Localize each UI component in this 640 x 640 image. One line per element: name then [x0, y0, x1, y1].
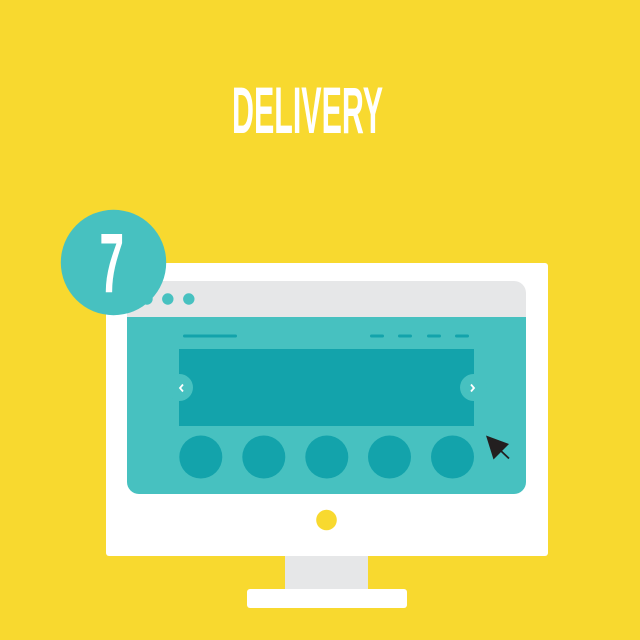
monitor stand neck — [285, 555, 368, 589]
delivery infographic: DELIVERY — [232, 73, 383, 147]
content circles — [179, 436, 474, 478]
step number: 7 — [100, 216, 124, 310]
icon: mouse cursor — [486, 436, 509, 460]
step number badge — [61, 210, 166, 315]
browser window — [127, 281, 526, 494]
navigation menu — [370, 334, 469, 338]
right slider arrow — [460, 374, 487, 401]
power button — [316, 510, 337, 530]
monitor body — [106, 263, 548, 556]
monitor — [106, 263, 548, 608]
left slider arrow — [166, 374, 193, 401]
monitor stand base — [247, 589, 407, 608]
window control dots — [141, 293, 194, 305]
hero banner — [179, 349, 474, 426]
site logo line — [183, 334, 237, 338]
browser content area — [127, 317, 526, 494]
browser title bar — [127, 281, 526, 317]
